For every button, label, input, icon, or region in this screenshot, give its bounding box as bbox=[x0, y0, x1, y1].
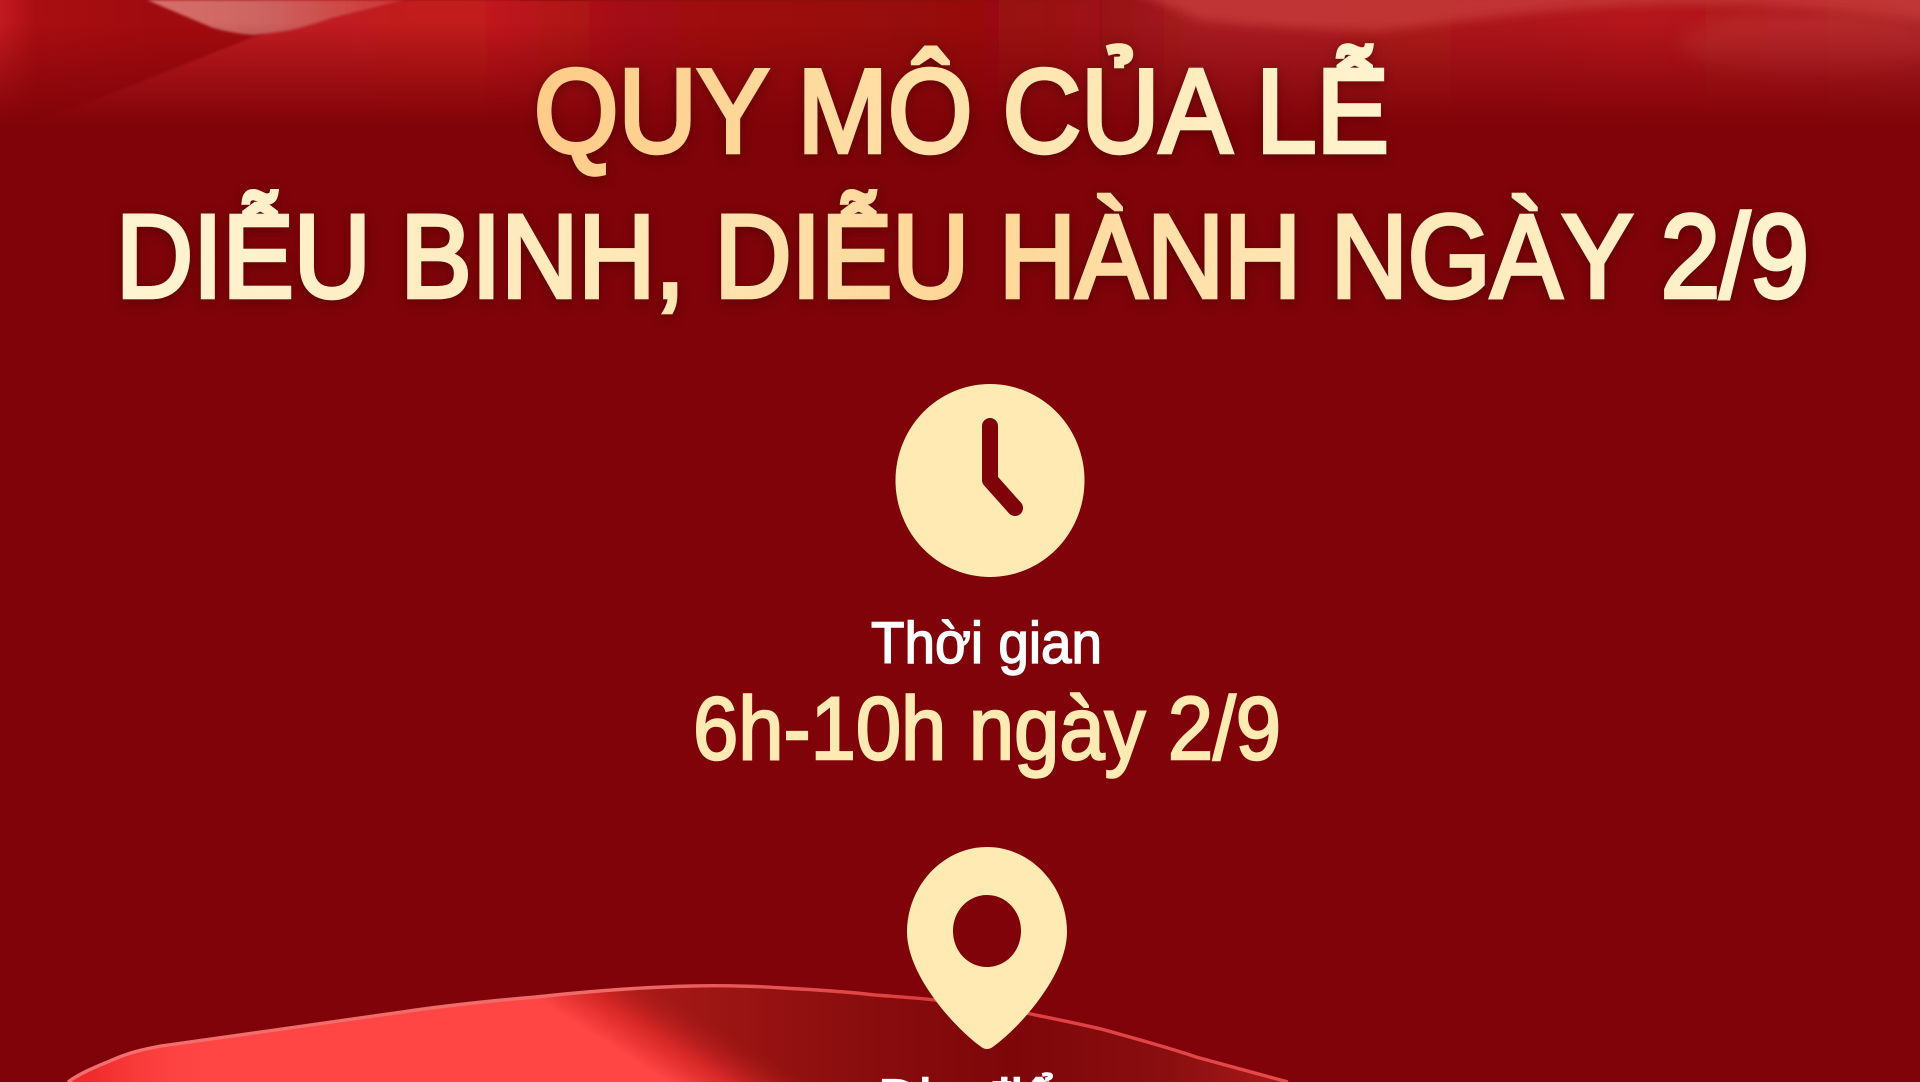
time block bbox=[693, 384, 1281, 778]
icon: clock bbox=[896, 384, 1084, 577]
title bbox=[116, 45, 1809, 323]
label: time: Thời gian bbox=[871, 611, 1102, 676]
value: time: 6h-10h ngày 2/9 bbox=[693, 678, 1281, 778]
location block bbox=[878, 847, 1102, 1082]
top ribbon decoration bbox=[0, 0, 1920, 114]
icon: location pin bbox=[907, 847, 1067, 1049]
bottom ribbon bbox=[60, 980, 1300, 1082]
title line 1: QUY MÔ CỦA LỄ bbox=[534, 45, 1389, 178]
